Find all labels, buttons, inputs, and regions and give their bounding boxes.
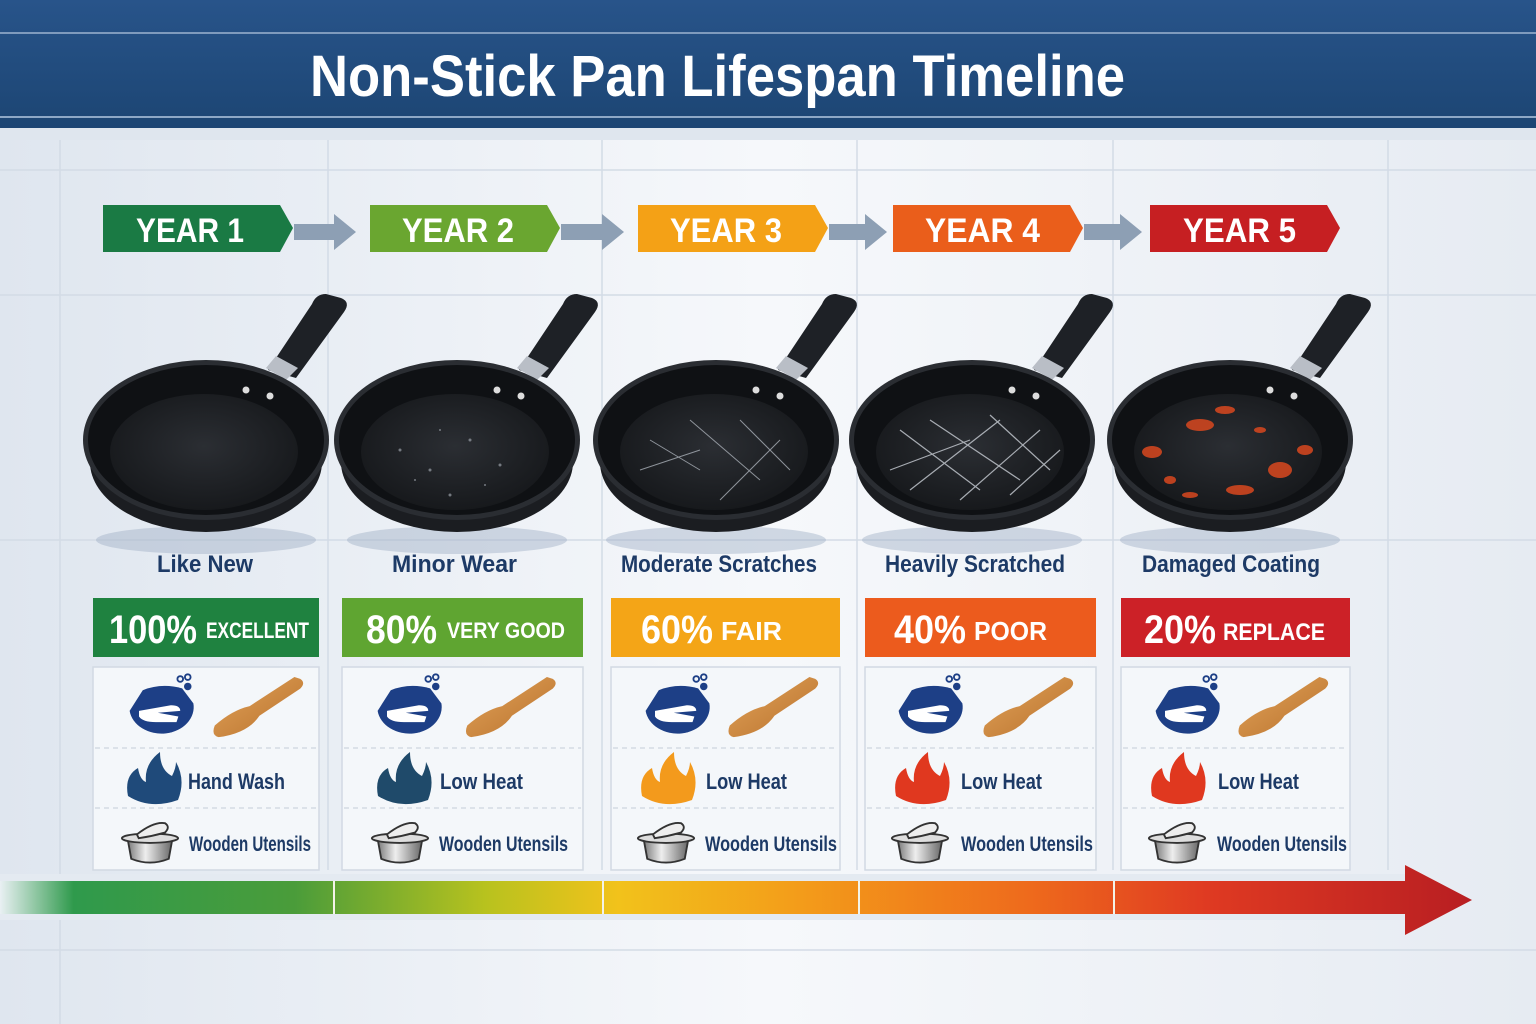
badge: year 2 — [370, 205, 560, 252]
rating year 3: FAIR — [721, 616, 782, 646]
care text: Low Heat — [706, 769, 788, 794]
year badges — [103, 205, 1340, 252]
badge: year 3 — [638, 205, 828, 252]
care text — [188, 769, 1347, 856]
rating year 1: EXCELLENT — [206, 618, 309, 643]
rating year 1: 100% — [109, 608, 197, 652]
badge: year 4 — [893, 205, 1083, 252]
rating boxes — [93, 598, 1350, 657]
rating year 1 — [93, 598, 319, 657]
badge: year 2: YEAR 2 — [402, 212, 514, 250]
care text: Wooden Utensils — [961, 833, 1093, 856]
arrow 4 — [1084, 214, 1142, 250]
header band — [0, 0, 1536, 140]
pan year 3 — [593, 294, 857, 554]
care text: Wooden Utensils — [1217, 833, 1347, 856]
care text: Wooden Utensils — [189, 833, 311, 856]
icons: flames — [127, 752, 1206, 804]
rating year 3 — [611, 598, 840, 657]
condition labels: Like New — [157, 551, 253, 578]
arrow 1 — [294, 214, 356, 250]
badge: year 1: YEAR 1 — [136, 212, 244, 250]
rating year 4: POOR — [974, 616, 1047, 646]
care text: Low Heat — [961, 769, 1043, 794]
title: Non-Stick Pan Lifespan Timeline — [310, 44, 1125, 109]
pans — [83, 294, 1371, 554]
badge: year 5: YEAR 5 — [1183, 212, 1296, 250]
icons: pots — [122, 823, 1205, 863]
badge: year 4: YEAR 4 — [925, 212, 1040, 250]
rating year 3: 60% — [641, 608, 713, 652]
rating year 5 — [1121, 598, 1350, 657]
care panels — [93, 667, 1350, 870]
rating year 4: 40% — [894, 608, 966, 652]
rating year 2: VERY GOOD — [447, 618, 565, 643]
rating year 2: 80% — [366, 608, 437, 652]
rating year 4 — [865, 598, 1096, 657]
care text: Wooden Utensils — [705, 833, 837, 856]
care text: Wooden Utensils — [439, 833, 568, 856]
condition labels: Damaged Coating — [1142, 551, 1320, 578]
condition labels — [157, 551, 1320, 578]
pan year 4 — [849, 294, 1113, 554]
pan year 1 — [83, 294, 347, 554]
condition labels: Moderate Scratches — [621, 551, 817, 578]
badge: year 1 — [103, 205, 293, 252]
badge: year 3: YEAR 3 — [670, 212, 782, 250]
care text: Low Heat — [1218, 769, 1300, 794]
condition labels: Heavily Scratched — [885, 551, 1065, 578]
care text: Hand Wash — [188, 769, 285, 794]
arrow 3 — [829, 214, 887, 250]
rating year 5: 20% — [1144, 608, 1216, 652]
rating year 2 — [342, 598, 583, 657]
condition labels: Minor Wear — [392, 551, 517, 578]
badge: year 5 — [1150, 205, 1340, 252]
arrow 2 — [561, 214, 624, 250]
icons: hand wash and spatula — [130, 674, 1328, 737]
care text: Low Heat — [440, 769, 524, 794]
pan year 5 — [1107, 294, 1371, 554]
pan year 2 — [334, 294, 598, 554]
timeline gradient arrow — [0, 865, 1472, 935]
rating year 5: REPLACE — [1223, 619, 1325, 646]
